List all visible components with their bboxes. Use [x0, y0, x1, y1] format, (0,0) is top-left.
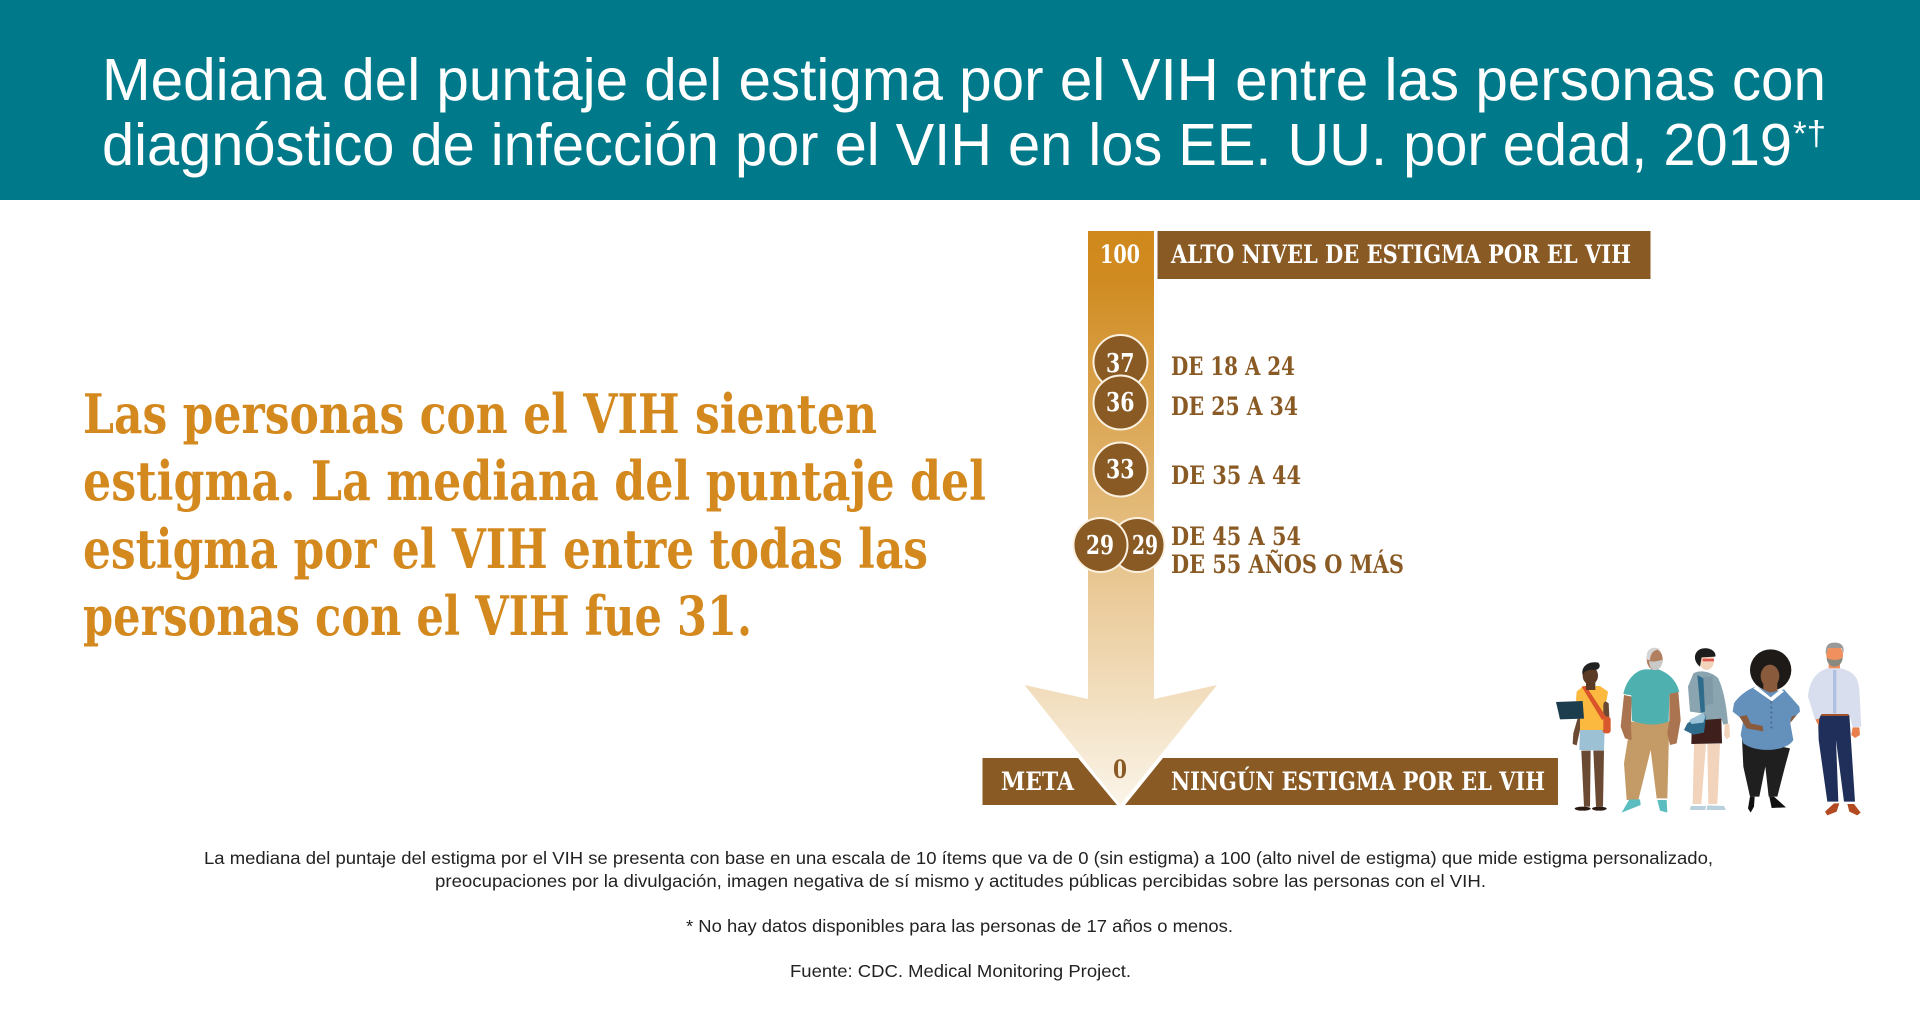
age group labels: DE 55 AÑOS O MÁS — [1171, 550, 1404, 579]
person in hoodie with glasses — [1684, 648, 1730, 810]
high stigma label: ALTO NIVEL DE ESTIGMA POR EL VIH — [1170, 240, 1631, 269]
marker: ages 25 to 34: 36 — [1106, 388, 1134, 418]
scale explanation: La mediana del puntaje del estigma por el VIH se presenta con base en una escala de 10 ítems que va de 0 (sin estigma) a 100 (alto nivel de estigma) que mide estigma personalizado, — [204, 848, 1713, 868]
marker: ages 45 to 54 — [1074, 518, 1128, 572]
high stigma label — [1158, 231, 1650, 279]
title: Mediana del puntaje del estigma por el VIH entre las personas con — [102, 47, 1826, 113]
age group labels: DE 25 A 34 — [1171, 392, 1298, 421]
no stigma label — [1125, 758, 1558, 805]
marker: ages 25 to 34 — [1094, 376, 1148, 430]
marker: ages 18 to 24: 37 — [1106, 349, 1134, 379]
title: *† — [1793, 115, 1826, 153]
title: diagnóstico de infección por el VIH en los EE. UU. por edad, 2019 — [102, 112, 1792, 178]
marker: ages 18 to 24 — [1094, 335, 1148, 389]
age group labels: DE 35 A 44 — [1171, 461, 1301, 490]
age group labels — [1171, 352, 1404, 579]
scale zero value: 0 — [1113, 755, 1127, 784]
older man in teal shirt — [1621, 648, 1681, 813]
no stigma label: NINGÚN ESTIGMA POR EL VIH — [1171, 767, 1545, 796]
marker: ages 55 and over: 29 — [1132, 531, 1158, 561]
scale explanation — [204, 848, 1713, 891]
footnotes — [204, 848, 1713, 981]
key message text: estigma. La mediana del puntaje del — [83, 449, 986, 513]
marker: ages 45 to 54: 29 — [1086, 531, 1114, 561]
key message text: personas con el VIH fue 31. — [83, 584, 752, 648]
age group labels: DE 45 A 54 — [1171, 522, 1301, 551]
marker: ages 35 to 44: 33 — [1106, 455, 1134, 485]
key message text — [83, 382, 986, 648]
goal label: META — [1001, 767, 1075, 796]
older man in dress shirt — [1808, 643, 1861, 815]
source: Fuente: CDC. Medical Monitoring Project. — [790, 961, 1131, 981]
person with laptop — [1556, 662, 1611, 811]
illustration: group of people — [1556, 643, 1861, 815]
stigma scale arrow — [1024, 231, 1217, 805]
title — [102, 47, 1826, 178]
scale explanation: preocupaciones por la divulgación, imagen negativa de sí mismo y actitudes públicas percibidas sobre las personas con el VIH. — [435, 871, 1486, 891]
scale top value: 100 — [1100, 240, 1140, 269]
marker: ages 35 to 44 — [1094, 442, 1148, 496]
data note: * No hay datos disponibles para las personas de 17 años o menos. — [686, 916, 1233, 936]
marker: ages 55 and over — [1110, 518, 1164, 572]
key message text: Las personas con el VIH sienten — [83, 382, 877, 446]
header banner — [0, 0, 1920, 200]
age group labels: DE 18 A 24 — [1171, 352, 1295, 381]
goal label — [982, 758, 1117, 805]
key message text: estigma por el VIH entre todas las — [83, 517, 928, 581]
woman in blue blouse — [1733, 649, 1800, 813]
